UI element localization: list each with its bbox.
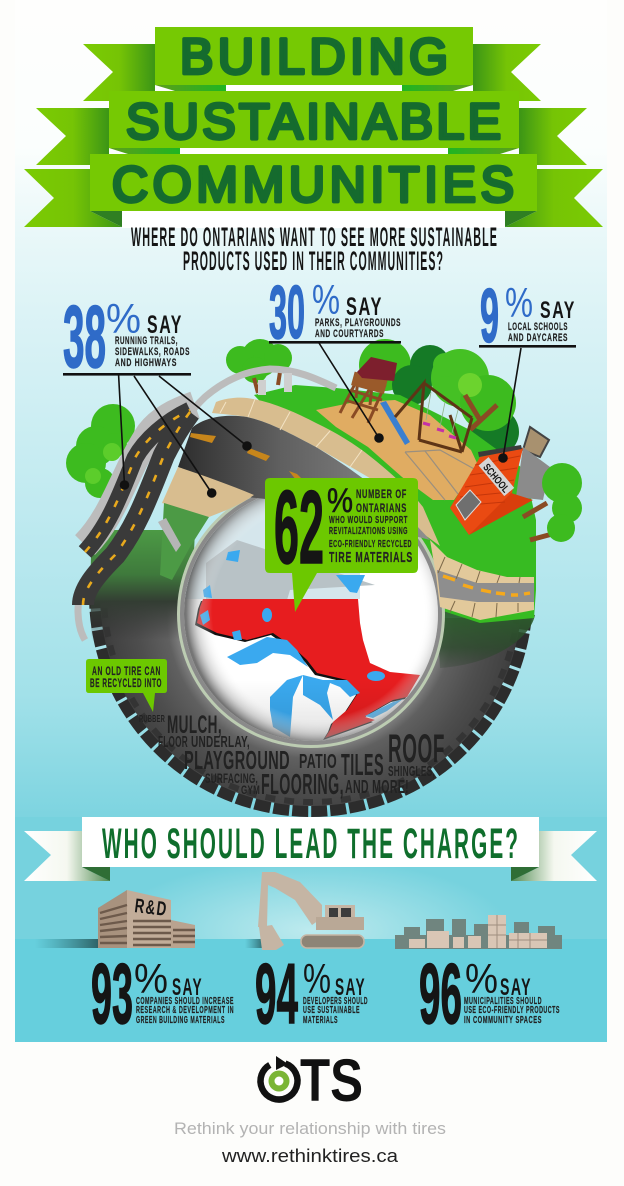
tagline: Rethink your relationship with tires [174,1119,446,1138]
stat: 94 percent: SAY [335,974,366,1001]
slide [380,401,410,445]
green slope under the road [160,503,209,580]
stat: 9 percent: % [505,279,533,326]
callout: old tire [86,659,167,712]
inner sidewalk [162,467,254,517]
recycled products word cloud: FLOOR [158,734,188,751]
ribbon: sustainable [36,91,587,165]
stat: 9 percent: AND DAYCARES [508,332,568,344]
swing set [395,383,472,452]
callout: 62 percent: ECO-FRIENDLY RECYCLED [329,539,412,550]
stat: 9 percent [479,274,576,359]
callout: 62 percent [265,470,418,612]
recycled products word cloud: RUBBER [139,714,165,725]
leader lines with dots [119,343,521,497]
recycled products word cloud: PLAYGROUND [184,745,290,775]
recycled products word cloud: SURFACING, [205,770,258,786]
trees: behind the playground [226,339,519,456]
icon: R&D building [35,890,195,948]
road pillar [158,518,181,552]
stat: 30 percent: PARKS, PLAYGROUNDS [315,317,401,329]
stat: 30 percent [269,270,401,354]
recycled products word cloud: GYM [241,783,260,797]
tire [89,603,532,817]
stat: 93 percent: COMPANIES SHOULD INCREASE [136,996,234,1007]
ribbon: building [83,27,541,101]
text: ROOF [388,727,445,771]
green ground [254,385,536,623]
stat: 38 percent: AND HIGHWAYS [115,357,177,369]
callout: 62 percent: NUMBER OF [356,487,407,501]
ribbon: sustainable: SUSTAINABLE [126,94,501,150]
subtitle question [131,222,498,276]
stat: 30 percent: AND COURTYARDS [315,328,384,340]
ribbon: communities [24,154,603,228]
banner: who should lead the charge [24,817,597,881]
title ribbon banner [24,27,603,228]
icon: city skyline [395,915,562,949]
callout: 62 percent: ONTARIANS [356,501,407,515]
recycled products word cloud: TILES [341,747,384,782]
playground sand [316,400,478,500]
hub with Ontario map [177,480,445,750]
stat: 94 percent: MATERIALS [303,1015,338,1026]
callout: old tire: BE RECYCLED INTO [90,676,162,690]
road surface [178,416,430,540]
icon: R&D building: R&D [133,895,169,921]
stat: 93 percent: SAY [172,974,203,1001]
stat: 93 percent: RESEARCH & DEVELOPMENT IN [136,1005,234,1016]
main road arc with sidewalks [158,398,440,580]
stat: 30 percent: SAY [346,293,383,321]
stat: 94 percent: % [303,955,331,1002]
playhouse [340,357,397,423]
recycled products word cloud: SHINGLES, [388,763,435,780]
ribbon: communities: COMMUNITIES [112,156,514,212]
stat: 96 percent: SAY [500,974,532,1001]
stat: 30 percent: 30 [269,270,305,354]
stat: 9 percent: 9 [480,274,499,359]
outer sidewalk [212,398,440,546]
stat: 9 percent: SAY [540,297,576,324]
stat: 96 percent: IN COMMUNITY SPACES [464,1015,542,1026]
stat: 96 percent [419,947,560,1042]
stat: 94 percent: 94 [255,947,298,1042]
callout: old tire: AN OLD TIRE CAN [92,664,161,678]
callout: 62 percent: WHO WOULD SUPPORT [329,515,408,526]
recycled products word cloud: PATIO [299,751,337,773]
stat: 93 percent [91,947,234,1042]
logo: OTS: TS [300,1047,363,1114]
school [450,427,550,535]
highway overpass [78,369,336,640]
recycled products word cloud: UNDERLAY, [191,734,250,751]
tree: right of school [523,463,582,542]
stat: 93 percent: % [134,955,168,1002]
stat: 38 percent: 38 [63,287,106,386]
stat: 96 percent: MUNICIPALITIES SHOULD [464,996,542,1007]
ribbon: building: BUILDING [180,28,448,84]
recycled products word cloud [139,711,445,801]
stat: 94 percent: USE SUSTAINABLE [303,1005,360,1016]
recycled products word cloud: FLOORING, [261,769,344,801]
stat: 96 percent: 96 [419,947,462,1042]
stat: 30 percent: % [312,276,340,323]
stat: 38 percent: SAY [147,311,183,339]
callout: 62 percent: REVITALIZATIONS USING [329,526,408,537]
road curving to the right [430,540,534,620]
callout: 62 percent: TIRE MATERIALS [329,549,413,566]
road dashes [190,433,216,443]
stat: 38 percent: RUNNING TRAILS, [115,335,178,347]
tree: left [66,404,138,498]
dark green hillside fade [90,530,535,668]
school: SCHOOL [480,462,512,496]
callout: 62 percent: % [327,482,353,520]
callout: 62 percent: 62 [274,470,324,586]
hopscotch lines [405,450,476,500]
stat: 94 percent: DEVELOPERS SHOULD [303,996,368,1007]
website url: www.rethinktires.ca [221,1145,399,1166]
stat: 93 percent: 93 [91,947,133,1042]
recycled products word cloud: MULCH, [167,711,222,739]
recycled products word cloud: AND MORE! [345,777,409,797]
stat: 93 percent: GREEN BUILDING MATERIALS [136,1015,225,1026]
stat: 38 percent: SIDEWALKS, ROADS [115,346,190,358]
stat: 9 percent: LOCAL SCHOOLS [508,321,568,333]
icon: excavator [245,872,364,950]
logo: OTS [255,1047,363,1114]
stat: 38 percent: % [106,295,141,342]
stat: 96 percent: % [465,955,498,1002]
